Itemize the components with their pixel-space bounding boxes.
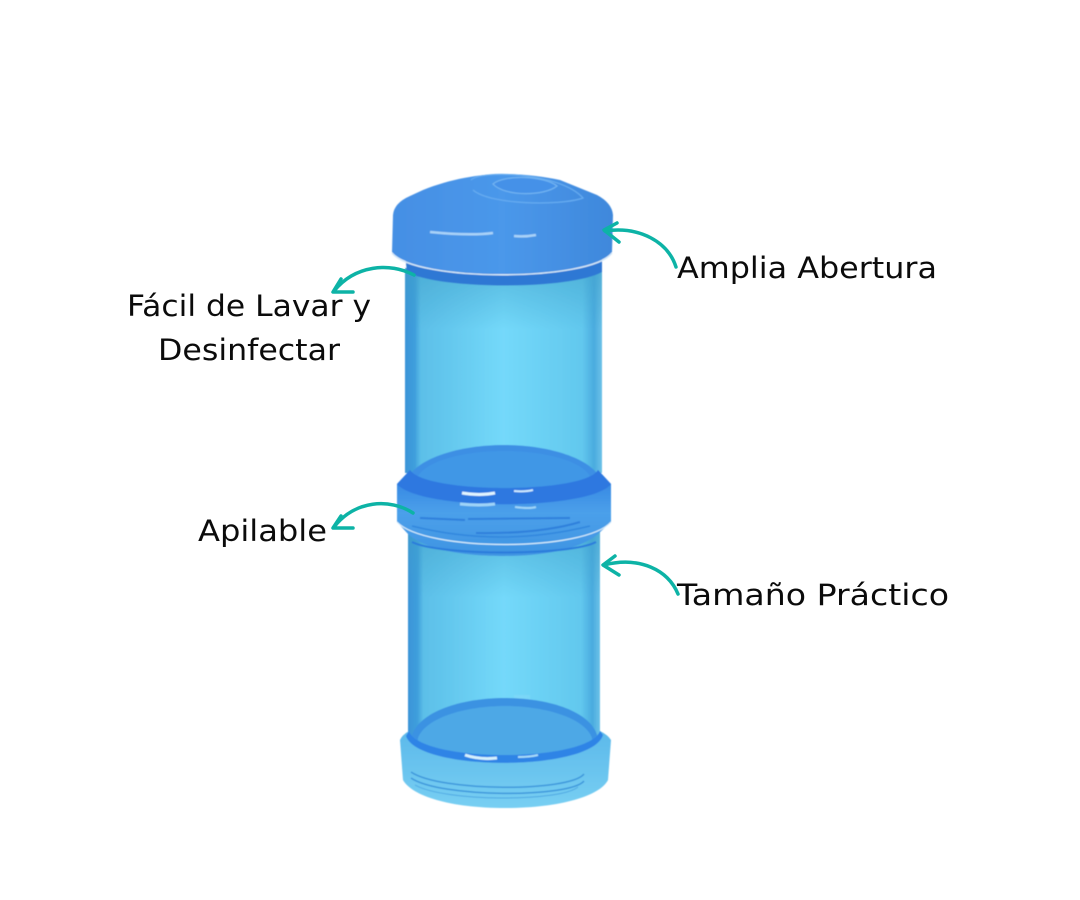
arrow: amplia abertura — [604, 223, 676, 267]
label: tamaño práctico: Tamaño Práctico — [676, 578, 949, 612]
upper jar body — [405, 268, 602, 473]
label: fácil de lavar y desinfectar: Desinfectar — [158, 333, 340, 367]
arrow: tamaño práctico — [603, 556, 678, 594]
label: apilable: Apilable — [198, 514, 327, 548]
lower jar body — [408, 530, 600, 755]
label: fácil de lavar y desinfectar — [127, 289, 371, 367]
middle connector ring — [397, 445, 611, 556]
product: blue stackable container — [392, 174, 613, 808]
base threaded ring — [400, 698, 611, 808]
label: fácil de lavar y desinfectar: Fácil de Lavar y — [127, 289, 371, 323]
label: amplia abertura: Amplia Abertura — [677, 251, 937, 285]
arrow: fácil de lavar — [333, 267, 414, 292]
arrow: apilable — [333, 504, 413, 528]
screw-top lid — [392, 174, 613, 286]
